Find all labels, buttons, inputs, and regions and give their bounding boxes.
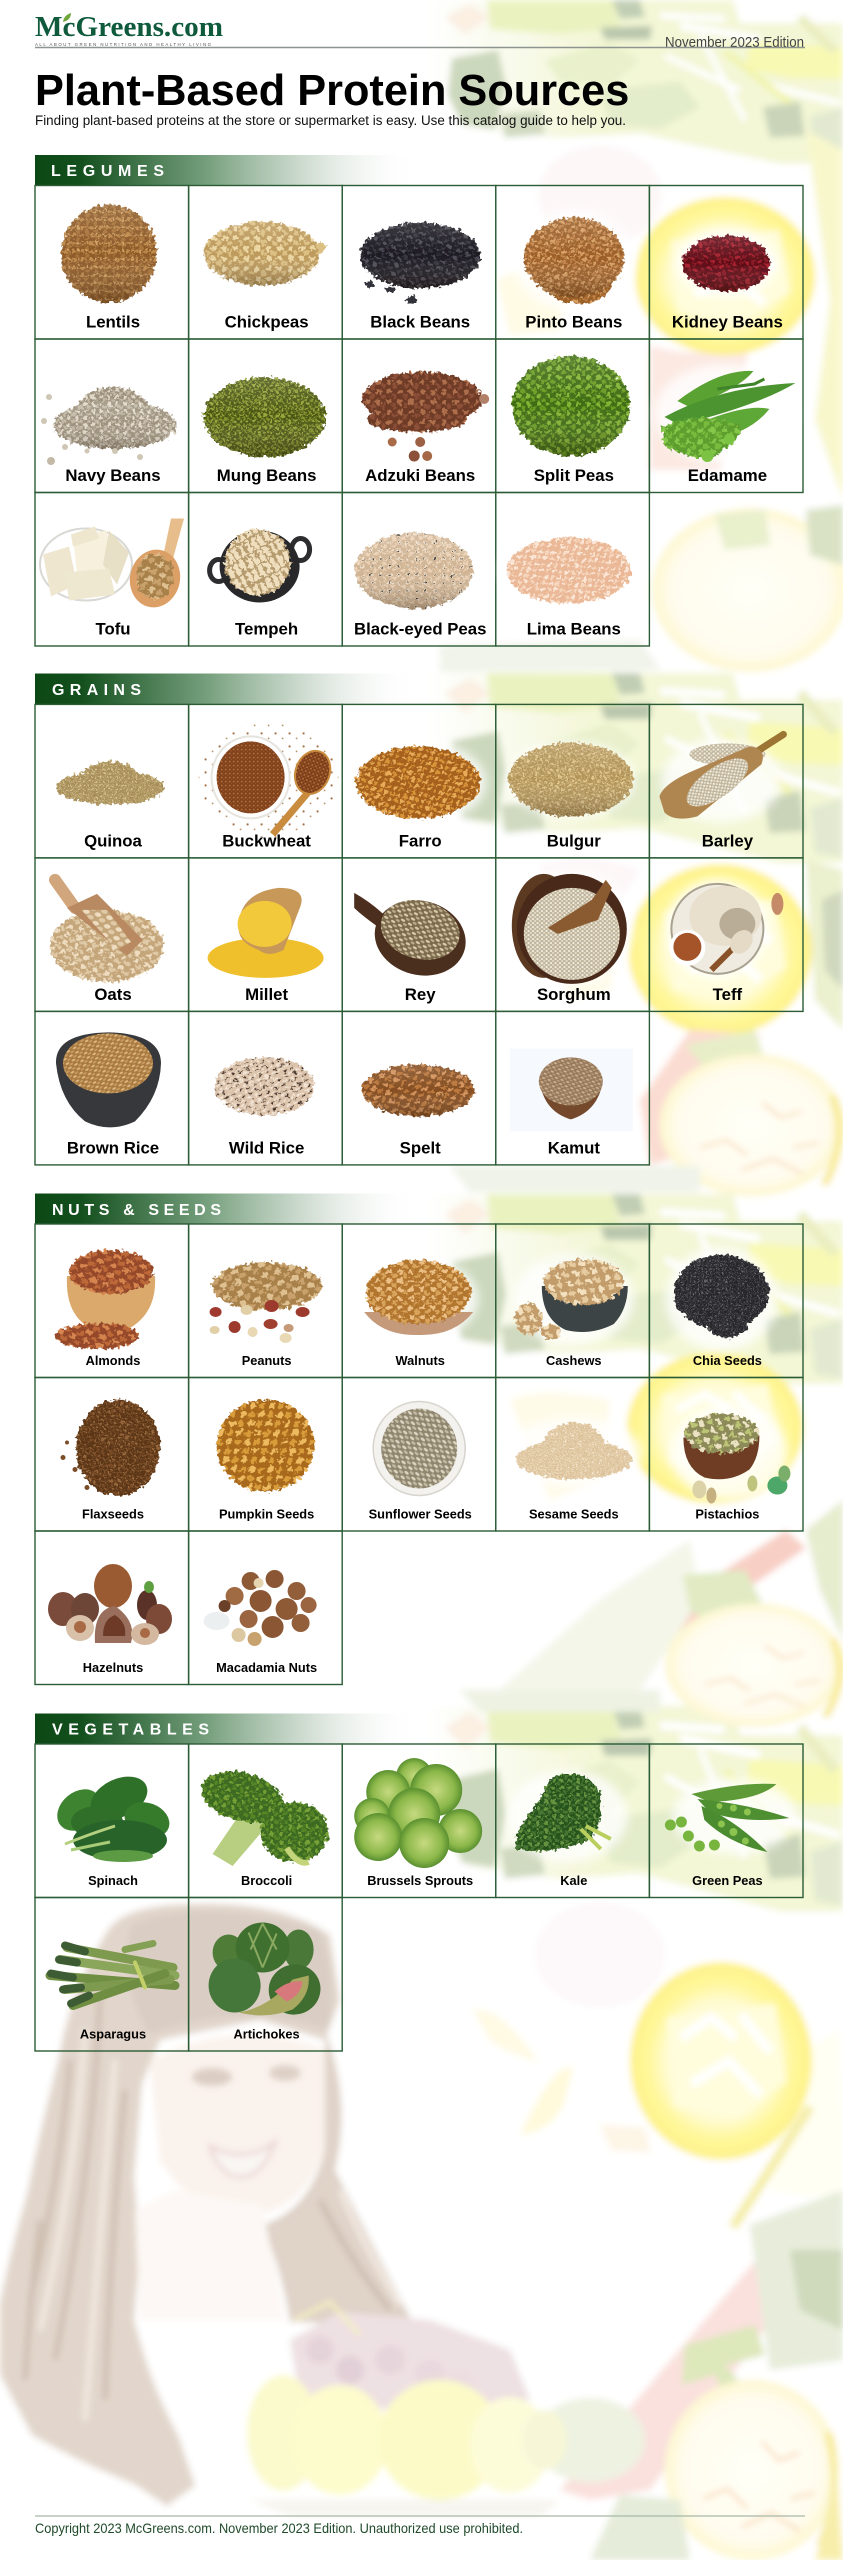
heading: vegetables bbox=[35, 1714, 420, 1744]
cell: broccoli bbox=[189, 1744, 342, 1898]
panel: legumes bbox=[35, 155, 803, 646]
panel: grains bbox=[35, 674, 803, 1165]
cell: kidney beans bbox=[649, 186, 803, 339]
label: Sesame Seeds bbox=[529, 1506, 619, 1522]
cell: pinto beans bbox=[496, 186, 649, 339]
icon: walnuts in bowl bbox=[358, 1257, 478, 1341]
label: Spinach bbox=[88, 1873, 138, 1888]
cell: hazelnuts bbox=[35, 1531, 189, 1684]
icon: edamame bbox=[654, 364, 795, 464]
icon: pinto beans bbox=[514, 210, 634, 310]
heading: vegetables: VEGETABLES bbox=[52, 1722, 209, 1738]
label: Kidney Beans bbox=[672, 312, 783, 332]
icon: sorghum in bowl bbox=[509, 870, 633, 986]
edition date: November 2023 Edition bbox=[665, 35, 804, 51]
icon: millet bbox=[208, 888, 324, 978]
footer copyright: Copyright 2023 McGreens.com. November 2023 Edition. Unauthorized use prohibited. bbox=[35, 2520, 523, 2536]
panel: nuts and seeds bbox=[35, 1194, 803, 1684]
label: Black Beans bbox=[370, 312, 470, 332]
heading: grains: GRAINS bbox=[52, 682, 141, 699]
cell: split peas bbox=[496, 339, 649, 492]
cell: oats bbox=[35, 858, 189, 1011]
label: Cashews bbox=[546, 1353, 602, 1368]
label: Tempeh bbox=[235, 620, 298, 638]
cell: lentils bbox=[35, 186, 189, 339]
cell: brown rice bbox=[35, 1011, 189, 1165]
icon: broccoli bbox=[196, 1763, 329, 1866]
label: Oats bbox=[94, 985, 132, 1004]
cell: barley bbox=[649, 704, 803, 858]
icon: kidney beans bbox=[676, 230, 776, 298]
cell: adzuki beans bbox=[342, 339, 496, 492]
label: Flaxseeds bbox=[82, 1506, 144, 1522]
label: Walnuts bbox=[396, 1353, 445, 1368]
cell: tofu bbox=[35, 492, 189, 646]
icon: lentils bbox=[61, 204, 157, 302]
icon: bulgur bbox=[507, 741, 635, 817]
cell: teff bbox=[649, 858, 803, 1011]
cell: bulgur bbox=[496, 704, 649, 858]
cell: rey bbox=[342, 858, 496, 1011]
cell: artichokes bbox=[189, 1898, 342, 2051]
label: Brussels Sprouts bbox=[367, 1873, 473, 1888]
label: Barley bbox=[702, 831, 754, 850]
label: Green Peas bbox=[692, 1873, 763, 1888]
cell: sesame seeds bbox=[496, 1378, 649, 1531]
icon: adzuki beans bbox=[362, 372, 489, 462]
icon: artichokes bbox=[209, 1922, 328, 2022]
icon: green peas bbox=[665, 1778, 796, 1854]
icon: cashews in dark bowl bbox=[514, 1253, 634, 1345]
cell: chickpeas bbox=[189, 186, 342, 339]
label: Edamame bbox=[688, 466, 767, 485]
label: Pumpkin Seeds bbox=[219, 1506, 314, 1522]
label: Lima Beans bbox=[527, 620, 621, 638]
icon: tempeh in pan bbox=[210, 530, 310, 602]
icon: sunflower seeds in bowl bbox=[373, 1402, 465, 1496]
heading: legumes: LEGUMES bbox=[51, 163, 164, 180]
label: Split Peas bbox=[534, 466, 614, 485]
label: Artichokes bbox=[234, 2026, 300, 2042]
label: Kale bbox=[560, 1873, 587, 1888]
cell: mung beans bbox=[189, 339, 342, 492]
label: Buckwheat bbox=[222, 831, 311, 850]
cell: sorghum bbox=[496, 858, 649, 1011]
cell: macadamia nuts bbox=[189, 1531, 342, 1684]
label: Quinoa bbox=[84, 831, 143, 850]
label: Farro bbox=[399, 831, 442, 850]
icon: split peas bbox=[506, 352, 636, 462]
label: Rey bbox=[405, 985, 436, 1004]
icon: lima beans bbox=[501, 530, 637, 610]
label: Asparagus bbox=[80, 2026, 146, 2042]
cell: quinoa bbox=[35, 704, 189, 858]
label: Black-eyed Peas bbox=[354, 620, 486, 638]
icon: brown rice bowl bbox=[56, 1032, 161, 1127]
heading: nuts and seeds bbox=[35, 1194, 420, 1224]
label: Chickpeas bbox=[225, 312, 309, 332]
label: Broccoli bbox=[241, 1873, 292, 1888]
panel: vegetables bbox=[35, 1714, 803, 2051]
label: Chia Seeds bbox=[693, 1353, 762, 1368]
label: Spelt bbox=[400, 1138, 441, 1157]
icon: brussels sprouts bbox=[354, 1758, 482, 1868]
icon: quinoa bbox=[56, 761, 164, 804]
icon: peanuts bbox=[210, 1262, 322, 1343]
icon: teff plate bbox=[667, 879, 783, 979]
label: Teff bbox=[713, 985, 743, 1004]
label: Kamut bbox=[548, 1138, 600, 1157]
icon: kamut bowl bbox=[510, 1048, 633, 1131]
cell: spinach bbox=[35, 1744, 189, 1898]
label: Mung Beans bbox=[217, 466, 316, 485]
label: Lentils bbox=[86, 312, 140, 332]
heading: nuts and seeds: NUTS & SEEDS bbox=[52, 1202, 221, 1219]
icon: rye in wooden spoon bbox=[354, 890, 474, 986]
cell: edamame bbox=[649, 339, 803, 492]
cell: navy beans bbox=[35, 339, 189, 492]
icon: pistachios bbox=[671, 1404, 790, 1504]
label: Sunflower Seeds bbox=[369, 1506, 472, 1522]
icon: oats and scoop bbox=[50, 880, 164, 982]
icon: mung beans bbox=[204, 377, 326, 457]
label: Wild Rice bbox=[229, 1138, 304, 1157]
icon: chickpeas bbox=[204, 222, 327, 286]
cell: flaxseeds bbox=[35, 1378, 189, 1531]
label: Pinto Beans bbox=[525, 312, 622, 332]
label: Hazelnuts bbox=[83, 1660, 143, 1675]
cell: green peas bbox=[649, 1744, 803, 1898]
cell: black-eyed peas bbox=[342, 492, 496, 646]
icon: tofu and soybeans bbox=[40, 518, 185, 612]
icon: farro bbox=[350, 740, 486, 824]
icon: spelt bbox=[362, 1064, 474, 1116]
label: Navy Beans bbox=[65, 466, 161, 485]
label: Pistachios bbox=[695, 1506, 759, 1522]
logo: McGreens.com bbox=[35, 11, 223, 43]
label: Almonds bbox=[86, 1353, 140, 1368]
icon: chia seeds bbox=[665, 1247, 777, 1351]
icon: kale bbox=[508, 1770, 628, 1862]
icon: macadamia nuts bbox=[204, 1570, 317, 1646]
icon: navy beans bbox=[41, 387, 177, 465]
logo: ALL ABOUT GREEN NUTRITION AND HEALTHY LIVING bbox=[35, 42, 212, 47]
cell: asparagus bbox=[35, 1898, 189, 2051]
icon: flaxseeds bbox=[60, 1400, 160, 1496]
icon: black beans bbox=[360, 222, 480, 303]
icon: hazelnuts bbox=[48, 1564, 172, 1645]
label: Macadamia Nuts bbox=[216, 1660, 317, 1675]
icon: almonds in bowl bbox=[55, 1250, 155, 1349]
heading: legumes bbox=[35, 155, 420, 186]
cell: sunflower seeds bbox=[342, 1378, 496, 1531]
icon: pumpkin seeds bbox=[217, 1400, 315, 1492]
label: Tofu bbox=[95, 620, 131, 638]
cell: buckwheat bbox=[189, 704, 342, 858]
cell: lima beans bbox=[496, 492, 649, 646]
cell: farro bbox=[342, 704, 496, 858]
cell: chia seeds bbox=[649, 1224, 803, 1378]
cell: kamut bbox=[496, 1011, 649, 1165]
cell: black beans bbox=[342, 186, 496, 339]
cell: peanuts bbox=[189, 1224, 342, 1378]
title: Plant-Based Protein Sources bbox=[35, 67, 629, 115]
icon: sesame seeds bbox=[506, 1418, 642, 1486]
label: Bulgur bbox=[547, 831, 601, 850]
icon: black-eyed peas bbox=[355, 532, 473, 608]
cell: spelt bbox=[342, 1011, 496, 1165]
heading: grains bbox=[35, 674, 420, 704]
cell: cashews bbox=[496, 1224, 649, 1378]
subtitle: Finding plant-based proteins at the store or supermarket is easy. Use this catalog guide to help you. bbox=[35, 113, 626, 128]
cell: almonds bbox=[35, 1224, 189, 1378]
label: Brown Rice bbox=[67, 1138, 159, 1157]
icon: asparagus bbox=[50, 1944, 175, 2006]
label: Peanuts bbox=[242, 1353, 291, 1368]
label: Adzuki Beans bbox=[365, 466, 475, 485]
icon: buckwheat bowl and spoon bbox=[199, 721, 339, 837]
cell: brussels sprouts bbox=[342, 1744, 496, 1898]
icon: barley scoop bbox=[659, 734, 783, 822]
label: Sorghum bbox=[537, 985, 611, 1004]
cell: pumpkin seeds bbox=[189, 1378, 342, 1531]
icon: wild rice bbox=[215, 1057, 315, 1115]
cell: tempeh bbox=[189, 492, 342, 646]
cell: kale bbox=[496, 1744, 649, 1898]
icon: spinach bbox=[49, 1768, 174, 1862]
label: Millet bbox=[245, 985, 288, 1004]
cell: pistachios bbox=[649, 1378, 803, 1531]
cell: wild rice bbox=[189, 1011, 342, 1165]
cell: millet bbox=[189, 858, 342, 1011]
cell: walnuts bbox=[342, 1224, 496, 1378]
